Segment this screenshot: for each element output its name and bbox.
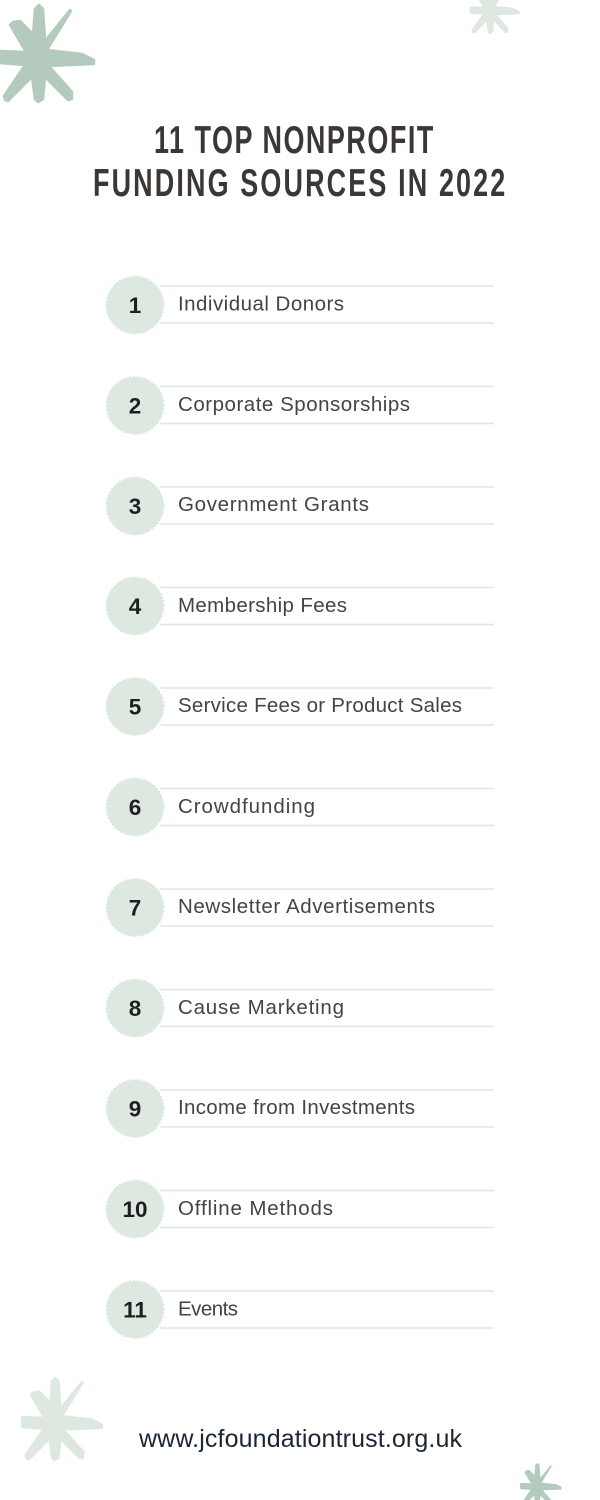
list item 4: Membership Fees: [178, 594, 347, 617]
list item 9: 9: [129, 1096, 141, 1122]
icon: small star top right: [470, 0, 519, 33]
list item 3: [106, 478, 494, 534]
icon: star bottom left: [22, 1378, 102, 1460]
list item 6: 6: [129, 795, 141, 820]
list item 1: 1: [129, 293, 141, 318]
list item 3: Government Grants: [178, 493, 369, 516]
list item 4: [106, 578, 494, 634]
list item 8: 8: [129, 996, 141, 1021]
list item 1: [106, 276, 494, 334]
list item 9: Income from Investments: [178, 1096, 415, 1119]
list item 10: 10: [122, 1197, 148, 1222]
icon: small star bottom right: [521, 1464, 561, 1500]
title: 11 TOP NONPROFIT: [154, 119, 433, 162]
list item 11: [106, 1281, 494, 1338]
list item 2: 2: [129, 394, 141, 418]
list item 5: [106, 678, 494, 735]
title: FUNDING SOURCES IN 2022: [93, 162, 505, 205]
list item 6: [106, 778, 494, 836]
list item 4: 4: [129, 594, 142, 619]
list item 9: [106, 1080, 494, 1137]
list item 8: [106, 980, 494, 1036]
title: [93, 119, 505, 205]
icon: large star top left: [0, 5, 94, 102]
list item 6: Crowdfunding: [178, 795, 315, 818]
list item 2: [106, 377, 494, 434]
list item 7: Newsletter Advertisements: [178, 895, 435, 918]
list item 11: 11: [123, 1298, 147, 1322]
list item 1: Individual Donors: [178, 292, 344, 316]
list item 11: Events: [178, 1298, 238, 1320]
list item 3: 3: [129, 494, 141, 519]
website url: www.jcfoundationtrust.org.uk: [138, 1425, 462, 1453]
list item 5: 5: [129, 694, 141, 720]
list item 2: Corporate Sponsorships: [178, 393, 410, 416]
list item 7: 7: [129, 896, 141, 920]
list item 10: [106, 1180, 494, 1238]
list item 10: Offline Methods: [178, 1197, 333, 1220]
list item 7: [106, 879, 494, 936]
list item 5: Service Fees or Product Sales: [178, 694, 462, 717]
list item 8: Cause Marketing: [178, 996, 344, 1019]
